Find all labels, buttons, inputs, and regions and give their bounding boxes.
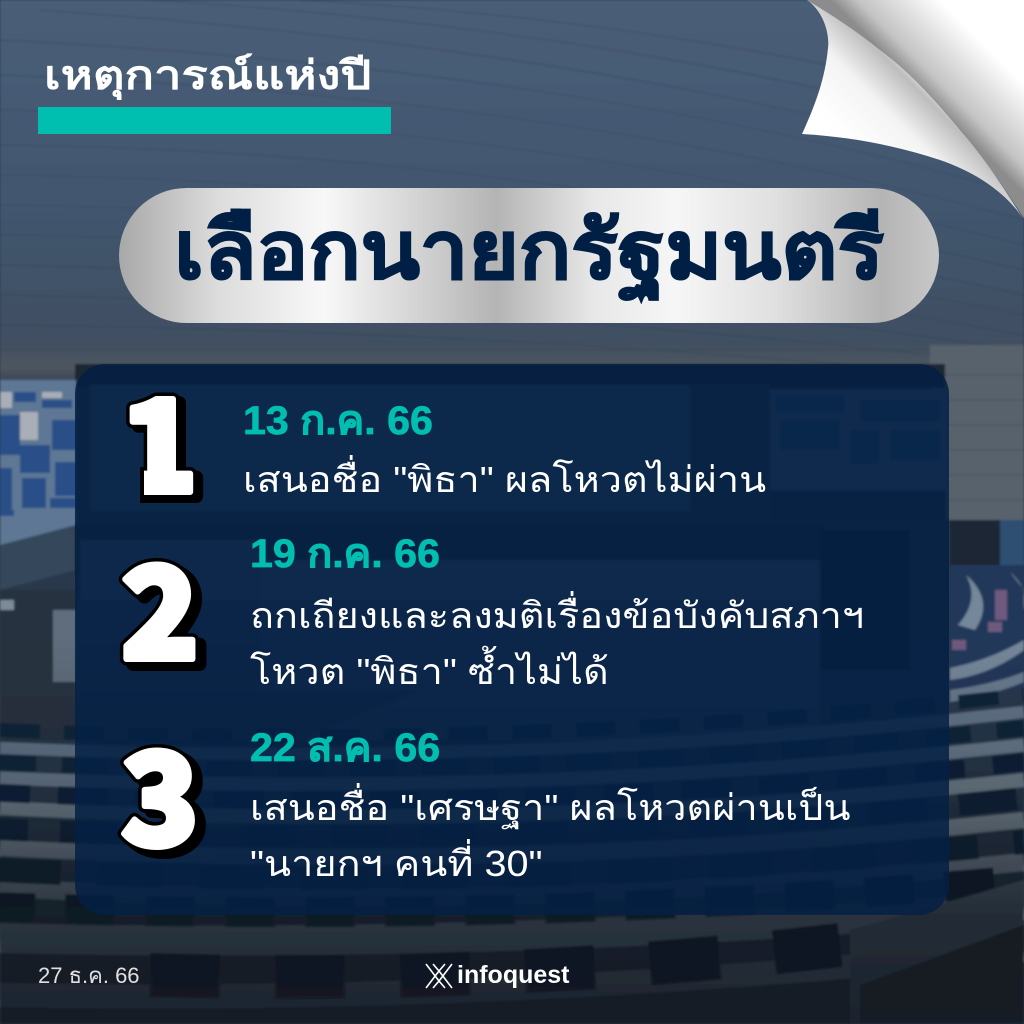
- panel: timeline background: [75, 364, 949, 915]
- stage platforms: [75, 525, 825, 575]
- timeline text: [243, 399, 864, 884]
- number 3: 3: [121, 697, 199, 882]
- number 1: [126, 392, 204, 503]
- numbers: [118, 392, 206, 859]
- number 2: 2: [121, 511, 199, 696]
- publication date: 27 ธ.ค. 66: [38, 963, 140, 988]
- grey wall right: [930, 345, 1024, 520]
- icon: X mark: [425, 964, 453, 988]
- heading underline bar: [38, 107, 391, 134]
- item 2 text: [250, 591, 864, 692]
- large foreground desk: [850, 880, 1024, 1024]
- number 2: 2: [128, 516, 206, 701]
- item 3 text: เสนอชื่อ "เศรษฐา" ผลโหวตผ่านเป็น: [250, 787, 851, 828]
- number 1: 1: [126, 348, 204, 533]
- heading: event of the year: เหตุการณ์แห่งปี: [44, 54, 371, 98]
- title pill: [119, 188, 939, 323]
- number 1: 1: [120, 344, 198, 529]
- item 1 text: เสนอชื่อ "พิธา" ผลโหวตไม่ผ่าน: [243, 459, 766, 500]
- page curl: [802, 0, 1024, 219]
- item 3 text: [250, 783, 851, 884]
- right screen: [770, 390, 946, 490]
- number 3: 3: [121, 697, 199, 882]
- item 3 text: "นายกฯ คนที่ 30": [250, 843, 543, 884]
- far right hemicycle: [950, 520, 1024, 570]
- item 2 date: 19 ก.ค. 66: [250, 532, 440, 576]
- title text: เลือกนายกรัฐมนตรี: [174, 206, 884, 295]
- seating rows: [0, 695, 1024, 997]
- left screen: [0, 380, 76, 545]
- number 2: 2: [121, 511, 199, 696]
- item 2 text: โหวต "พิธา" ซ้ำไม่ได้: [250, 651, 609, 692]
- number 1: 1: [120, 344, 198, 529]
- centre dark band + big screen: [75, 364, 945, 388]
- item 3 date: 22 ส.ค. 66: [250, 726, 440, 770]
- wordmark: infoquest: [457, 961, 570, 989]
- item 1 date: 13 ก.ค. 66: [243, 399, 433, 443]
- roof lines: [0, 0, 1024, 380]
- logo: infoquest: [425, 961, 570, 989]
- item 2 text: ถกเถียงและลงมติเรื่องข้อบังคับสภาฯ: [250, 595, 864, 636]
- number 3: 3: [128, 702, 206, 887]
- left dark wall: [0, 590, 76, 740]
